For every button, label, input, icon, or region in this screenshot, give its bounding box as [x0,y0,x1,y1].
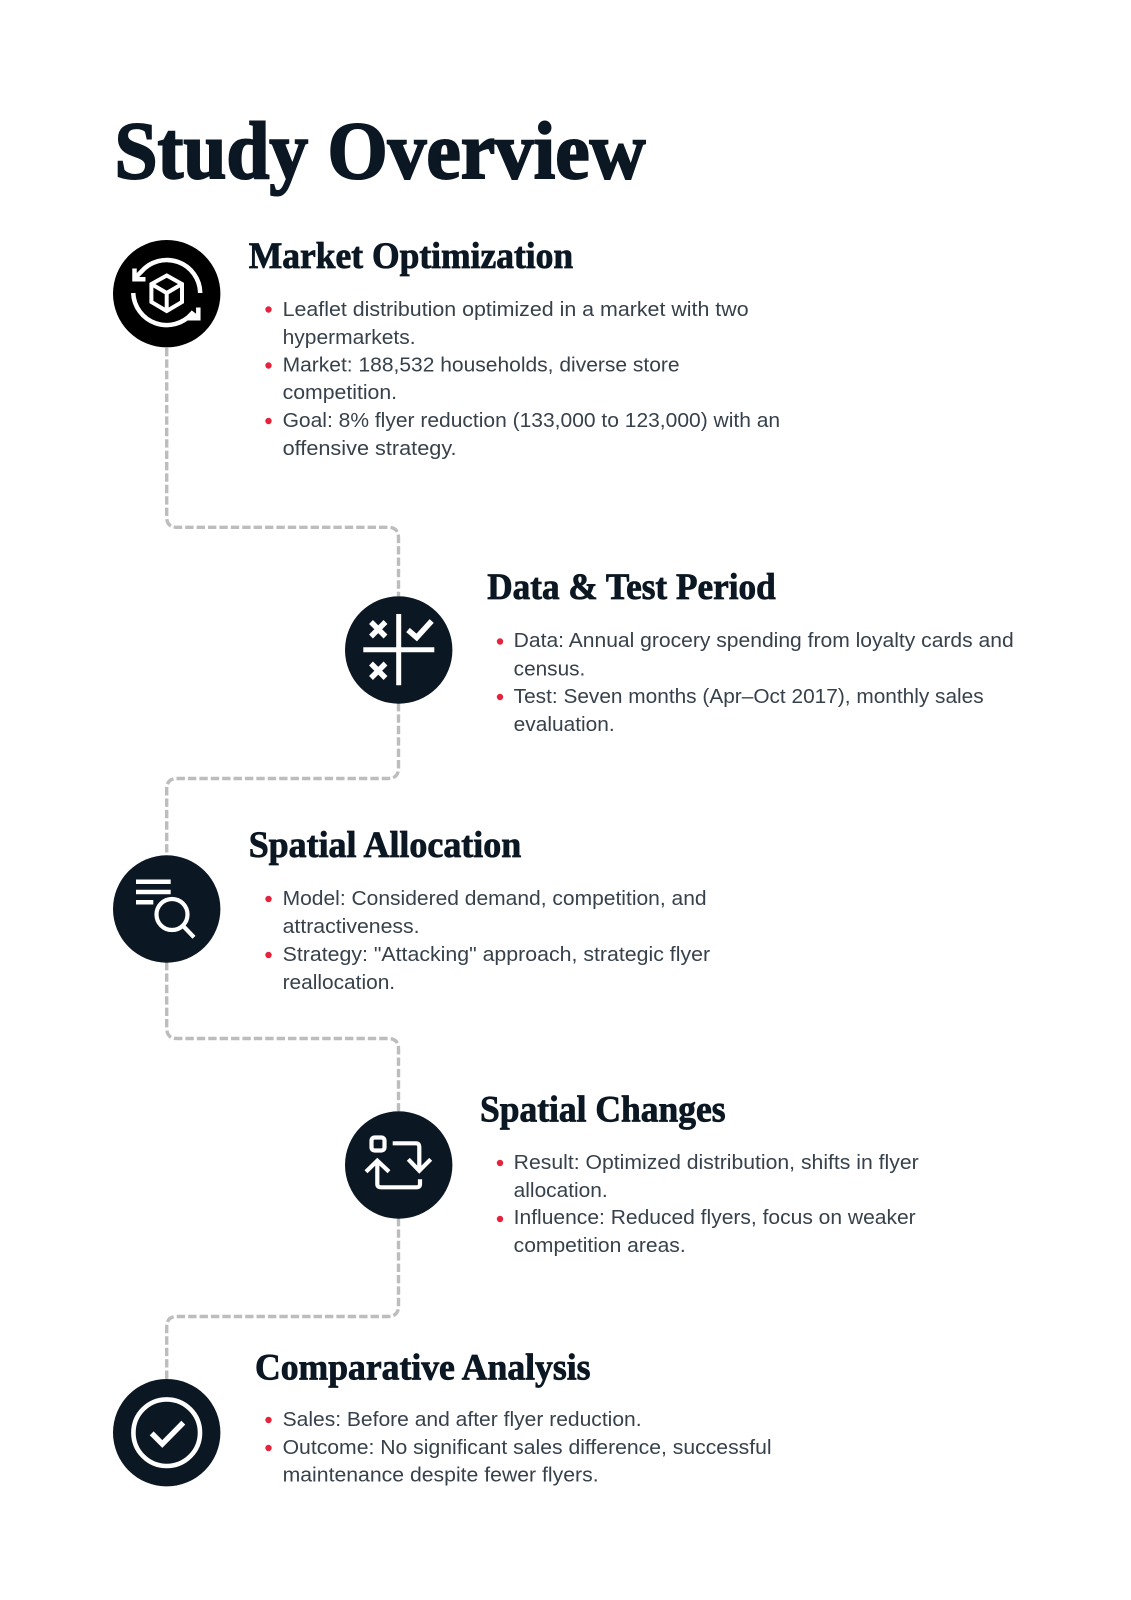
bullet list [497,630,1014,736]
panel: comparative analysis [113,1348,772,1486]
connector: step 4 to step 5 [167,1218,398,1379]
bullet list: Strategy: "Attacking" approach, strategic flyer [283,944,710,966]
bullet list: competition areas. [514,1235,686,1257]
bullet list: reallocation. [283,972,395,994]
heading: Comparative Analysis [255,1348,590,1388]
bullet list: allocation. [514,1180,608,1202]
bullet list: maintenance despite fewer flyers. [283,1464,599,1486]
bullet list: Market: 188,532 households, diverse store [283,354,680,376]
heading: Spatial Allocation [249,825,522,866]
icon: search list [113,855,220,963]
bullet list: Data: Annual grocery spending from loyalty cards and [514,630,1014,652]
bullet list: Test: Seven months (Apr–Oct 2017), monthly sales [514,686,984,708]
bullet list: competition. [283,382,397,404]
bullet list: Model: Considered demand, competition, and [283,888,707,910]
panel: data and test period [345,567,1014,736]
connector: step 2 to step 3 [167,703,398,855]
bullet list: offensive strategy. [283,438,457,460]
connector: step 1 to step 2 [167,348,398,596]
bullet list: Outcome: No significant sales difference, successful [283,1437,772,1459]
bullet list: Result: Optimized distribution, shifts in flyer [514,1152,919,1174]
bullet list [265,1409,772,1486]
icon: check circle [113,1379,220,1486]
bullet list: Goal: 8% flyer reduction (133,000 to 123,000) with an [283,410,780,432]
heading: Market Optimization [249,236,574,277]
icon: decision matrix [345,596,452,704]
bullet list [497,1152,919,1257]
heading: Data & Test Period [487,567,776,608]
panel: spatial changes [345,1090,919,1257]
panel: market optimization [113,236,780,460]
bullet list: census. [514,658,585,680]
bullet list: attractiveness. [283,916,420,938]
bullet list: Influence: Reduced flyers, focus on weaker [514,1207,916,1229]
panel: spatial allocation [113,825,710,994]
heading: Spatial Changes [480,1090,726,1130]
bullet list: Leaflet distribution optimized in a market with two [283,299,749,321]
title: Study Overview [114,105,646,196]
icon: rotating box [113,240,220,347]
connector: step 3 to step 4 [167,962,398,1111]
bullet list: evaluation. [514,714,615,736]
bullet list [265,299,780,460]
icon: exchange arrows [345,1111,452,1219]
bullet list [265,888,710,994]
bullet list: Sales: Before and after flyer reduction. [283,1409,642,1431]
bullet list: hypermarkets. [283,327,416,349]
